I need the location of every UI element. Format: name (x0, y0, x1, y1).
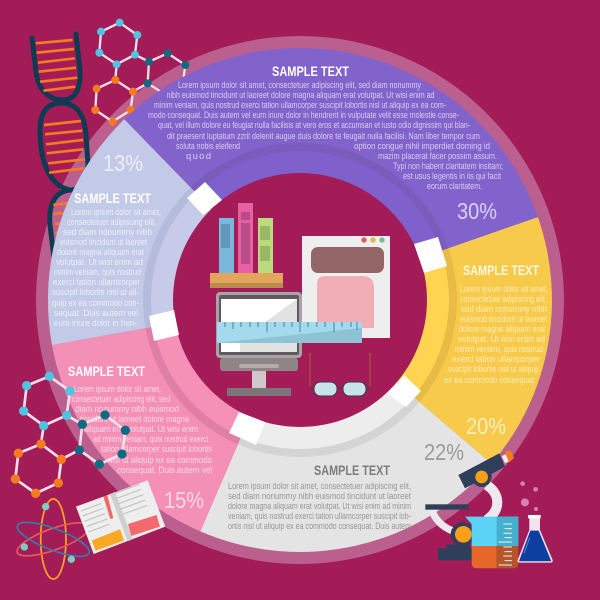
text block: yellow segment: dolore magna aliquam erat (459, 324, 545, 335)
text block: pink segment: Lorem ipsum dolor sit amet, (74, 384, 161, 395)
text block: lavender segment: Lorem ipsum dolor sit amet, (71, 207, 161, 218)
text block: pink segment: consequat. Duis autem vel (117, 465, 212, 476)
text block: yellow segment: sed diam nonummy nibh (461, 304, 547, 315)
text block: purple segment: quod (186, 151, 211, 162)
segment: purple 30% (124, 48, 538, 300)
segment: pink 15% (52, 300, 300, 531)
text block: yellow segment: consectetuer adipiscing elit, (460, 294, 547, 305)
text block: purple segment (148, 63, 503, 192)
text block: yellow segment: exerci tation ullamcorper (452, 354, 540, 365)
text block: lavender segment: sed diam nonummy nibh (63, 227, 152, 238)
percentage: 13%: 13% (103, 150, 143, 176)
text block: lavender segment: quip ex ea commodo con- (52, 298, 139, 309)
icon: flask with bubbles (517, 481, 553, 563)
text block: purple segment: mazim placerat facer possim assum. (378, 151, 497, 162)
icon: glasses (310, 353, 370, 396)
text block: lavender segment: volutpat. Ut wisi enim ad (56, 257, 143, 268)
text block: purple segment: eorum claritatem. (427, 181, 482, 192)
text block: yellow segment: suscipit lobortis nisl ut aliquip (448, 364, 539, 375)
percentage: 15%: 15% (164, 487, 204, 513)
text block: gray segment: Lorem ipsum dolor sit amet, consectetuer adipiscing elit, (228, 481, 411, 492)
text block: pink segment: consectetuer adipiscing elit, sed (72, 394, 170, 405)
text block: yellow segment: minim veniam, quis nostrud (455, 344, 543, 355)
text block: purple segment: modo consequat. Duis autem vel eum iriure dolor in hendrerit in vulputate velit esse molestie conse- (148, 110, 459, 121)
segment: gray 22% (200, 300, 492, 552)
text block: purple segment: quat, vel illum dolore eu feugiat nulla facilisis at vero eros et accumsan et iusto odio dignissim qui blan- (158, 120, 470, 131)
text block: yellow segment (444, 262, 548, 386)
text block: lavender segment: SAMPLE TEXT (74, 190, 151, 206)
text block: gray segment: sed diam nonummy nibh euismod tincidunt ut laoreet (228, 491, 411, 502)
text block: gray segment (228, 462, 411, 532)
text block: purple segment: SAMPLE TEXT (272, 63, 349, 79)
icon: open book (76, 480, 165, 554)
text block: pink segment: tation ullamcorper suscipit lobortis (101, 444, 212, 455)
icon: DNA helix (32, 34, 88, 258)
text block: lavender segment: euismod tincidunt ut laoreet (60, 237, 147, 248)
segment: yellow 20% (300, 217, 552, 464)
text block: gray segment: SAMPLE TEXT (314, 462, 390, 478)
icon: beaker (465, 517, 518, 568)
text block: lavender segment: consectetuer adipiscing elit, (67, 217, 156, 228)
text block: purple segment: soluta nobis eleifend (176, 141, 240, 152)
text block: gray segment: veniam, quis nostrud exerci tation ullamcorper suscipit lob- (228, 511, 411, 522)
percentage: 20%: 20% (466, 413, 506, 439)
text block: gray segment: ortis nisl ut aliquip ex ea commodo consequat. Duis autem (228, 521, 411, 532)
icon: lower molecule (11, 372, 130, 498)
text block: lavender segment: eum iriure dolor in hen- (54, 318, 137, 329)
text block: yellow segment: euismod tincidunt ut laoreet (460, 314, 547, 325)
text block: yellow segment: Lorem ipsum dolor sit amet, (460, 284, 548, 295)
text block: pink segment: ad minim veniam, quis nostrud exerci (93, 434, 208, 445)
text block: lavender segment: suscipit lobortis nisl ut ali- (52, 287, 139, 298)
icon: atom (14, 499, 93, 579)
segment: lavender 13% (48, 119, 300, 345)
text block: purple segment: minim veniam, quis nostrud exerci tation ullamcorper suscipit lobortis nisl ut aliquip ex ea com- (154, 100, 446, 111)
text block: pink segment: tincidunt ut laoreet dolore magna (80, 414, 190, 425)
text block: purple segment: nibh euismod tincidunt ut laoreet dolore magna aliquam erat volutpat. Ut wisi enim ad (166, 90, 434, 101)
text block: purple segment: Typi non habent claritatem insitam; (393, 161, 503, 172)
text block: pink segment (68, 363, 212, 476)
text block: lavender segment: sequat. Duis autem vel (54, 308, 138, 319)
text block: yellow segment: SAMPLE TEXT (463, 262, 539, 278)
text block: pink segment: diam nonummy nibh euismod (75, 404, 179, 415)
percentage: 30%: 30% (457, 198, 497, 224)
text block: lavender segment (52, 190, 161, 329)
text block: yellow segment: volutpat. Ut wisi enim ad (458, 334, 545, 345)
text block: lavender segment: dolore magna aliquam erat (57, 247, 144, 258)
text block: pink segment: aliquam erat volutpat. Ut wisi enim (84, 424, 198, 435)
icon: top molecule (91, 19, 189, 126)
icon: books on shelf (210, 203, 283, 288)
donut chart wheel (48, 48, 552, 552)
icon: window card (302, 236, 390, 338)
text block: lavender segment: exerci tation ullamcorper (53, 277, 140, 288)
text block: purple segment: option congue nihil imperdiet doming id (354, 141, 490, 152)
text block: purple segment: est usus legentis in iis qui facit (403, 171, 501, 182)
icon: microscope (425, 450, 514, 560)
outer ring (36, 36, 564, 564)
text block: lavender segment: minim veniam, quis nostrud (54, 267, 141, 278)
percentage: 22%: 22% (424, 439, 464, 465)
icon: monitor (216, 292, 302, 396)
text block: purple segment: Lorem ipsum dolor sit amet, consectetuer adipiscing elit, sed diam nonummy (178, 80, 421, 91)
text block: gray segment: dolore magna aliquam erat volutpat. Ut wisi enim ad minim (228, 501, 411, 512)
text block: purple segment: dit praesent luptatum zzril delenit augue duis dolore te feugait nulla facilisi. Nam liber tempor cum (167, 131, 480, 142)
icon: ruler (217, 322, 362, 343)
text block: pink segment: SAMPLE TEXT (68, 363, 145, 379)
text block: pink segment: nisl ut aliquip ex ea commodo (108, 455, 212, 466)
text block: yellow segment: ex ea commodo consequat. (444, 375, 536, 386)
